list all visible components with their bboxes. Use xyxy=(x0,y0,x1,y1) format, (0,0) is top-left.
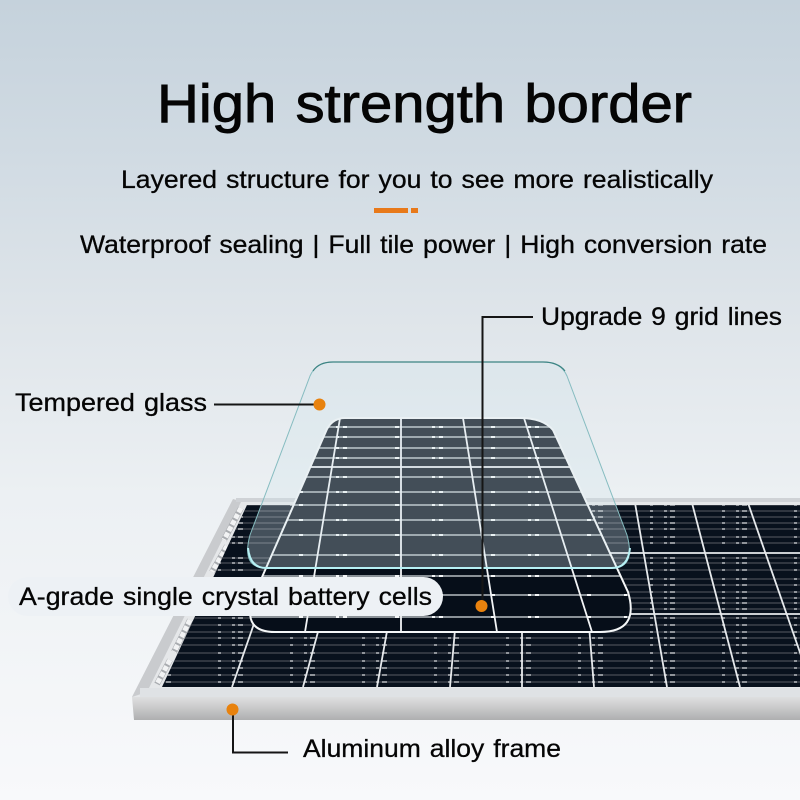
callout: upgrade 9 grid lines xyxy=(476,303,782,612)
glass top edge xyxy=(313,362,565,371)
leader line xyxy=(214,404,316,406)
title: High strength border xyxy=(157,74,692,134)
aluminum frame left mounting slots xyxy=(157,508,241,684)
solar panel base xyxy=(132,498,800,720)
callout: tempered glass xyxy=(15,389,326,417)
orange divider xyxy=(374,208,418,213)
label: Aluminum alloy frame xyxy=(303,735,561,763)
aluminum frame top surface xyxy=(132,499,800,697)
column and main row lines xyxy=(232,503,800,687)
label: A-grade single crystal battery cells xyxy=(19,583,432,611)
aluminum frame front face xyxy=(132,697,800,720)
callout: aluminum frame xyxy=(226,704,561,763)
feature line: Waterproof sealing | Full tile power | High conversion rate xyxy=(80,231,767,259)
marker dot xyxy=(314,398,326,410)
aluminum frame top rim xyxy=(236,498,800,502)
leader line xyxy=(482,317,533,604)
tempered glass layer xyxy=(248,362,630,568)
aluminum frame slot highlights xyxy=(157,508,241,684)
label: Upgrade 9 grid lines xyxy=(541,303,782,331)
floating cell layer xyxy=(240,418,640,632)
marker dot xyxy=(226,704,238,716)
label pill xyxy=(8,577,443,616)
cell layer rows xyxy=(240,418,640,632)
glass bottom edge xyxy=(248,548,630,568)
cell layer main lines xyxy=(300,418,600,632)
aluminum frame outer left bevel xyxy=(132,499,241,697)
cell rows xyxy=(160,503,800,687)
subtitle: Layered structure for you to see more realistically xyxy=(121,166,714,194)
aluminum frame bottom lip xyxy=(140,688,800,697)
cell layer fill xyxy=(250,418,631,632)
dark cell area xyxy=(162,505,800,687)
callout: battery cells xyxy=(8,577,443,616)
label: Tempered glass xyxy=(15,389,207,417)
cell layer outline xyxy=(250,418,631,632)
glass pane xyxy=(248,362,629,568)
leader line xyxy=(233,711,288,752)
marker dot xyxy=(476,600,488,612)
